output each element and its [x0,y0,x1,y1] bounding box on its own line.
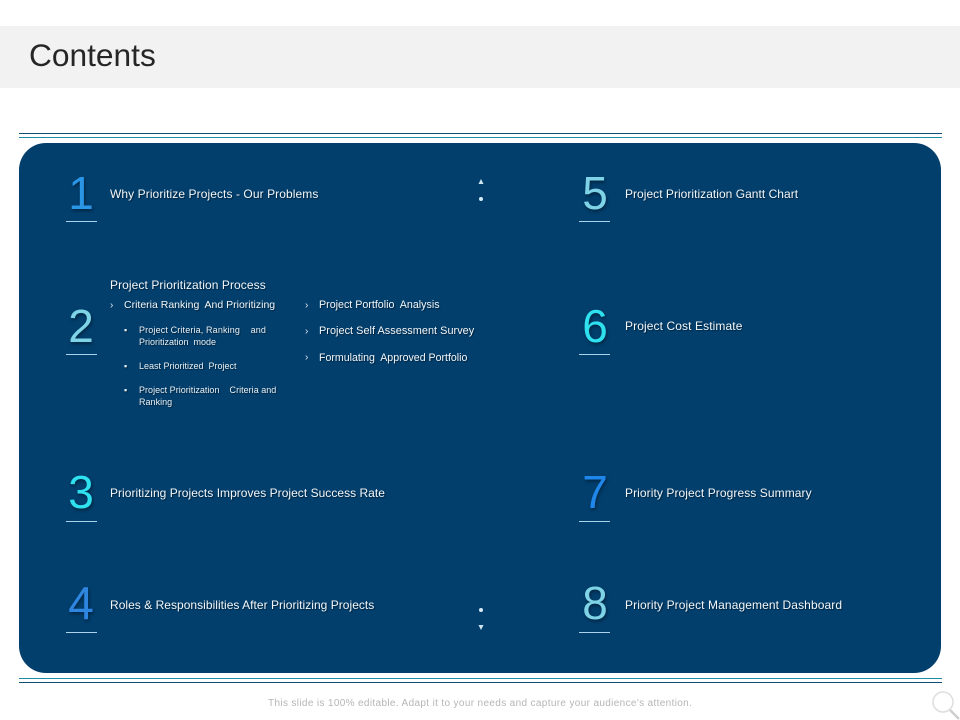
label 8: Priority Project Management Dashboard [625,598,842,612]
item 1 [66,167,320,222]
bottom double rule [19,678,942,683]
item 3 [66,466,386,522]
top double rule [19,133,942,138]
label 7: Priority Project Progress Summary [625,486,812,500]
number 5: 5 [582,167,608,219]
underline 1 [66,221,97,222]
sub list c: Project Self Assessment Survey [319,325,474,337]
bullet a1: ▪ [124,325,127,335]
icon: scroll marker top [478,179,484,201]
icon: scroll marker bottom [478,608,484,630]
icon: magnifier [932,691,960,720]
label 5: Project Prioritization Gantt Chart [625,187,798,201]
item 4 [66,577,375,633]
title: Contents [29,37,156,73]
sub list arrow d: › [305,352,308,363]
number 4: 4 [68,577,94,629]
item 8 [579,577,842,633]
number 8: 8 [582,577,608,629]
underline 5 [579,221,610,222]
sub list arrow b: › [305,300,308,311]
sub list arrow c: › [305,326,308,337]
underline 6 [579,354,610,355]
sub list d: Formulating Approved Portfolio [319,352,467,364]
sub item a3: Ranking [139,397,172,407]
number 1: 1 [68,167,94,219]
sub item a2: Least Prioritized Project [139,361,237,371]
panel: contents list [19,143,941,673]
sub list a: Criteria Ranking And Prioritizing [124,299,275,311]
bullet a3: ▪ [124,385,127,395]
label 1: Why Prioritize Projects - Our Problems [110,187,318,201]
item 7 [579,466,813,522]
heading 2: Project Prioritization Process [110,278,266,292]
underline 4 [66,632,97,633]
sub list arrow a: › [110,300,113,311]
footer note: This slide is 100% editable. Adapt it to your needs and capture your audience's attention. [268,698,692,709]
underline 7 [579,521,610,522]
sub item a3 [139,385,277,408]
underline 2 [66,354,97,355]
number 6: 6 [582,300,608,352]
item 2 [66,278,476,408]
label 3: Prioritizing Projects Improves Project Success Rate [110,486,385,500]
number 3: 3 [68,466,94,518]
underline 3 [66,521,97,522]
number 2: 2 [68,300,94,352]
item 5 [579,167,799,222]
sub item a3: Project Prioritization Criteria and [139,385,276,395]
sub item a1: Project Criteria, Ranking and [139,325,266,335]
bullet a2: ▪ [124,361,127,371]
item 6 [579,300,744,355]
title band [0,26,960,88]
number 7: 7 [582,466,608,518]
sub item a1 [139,325,267,347]
label 4: Roles & Responsibilities After Prioritizing Projects [110,598,374,612]
sub list b: Project Portfolio Analysis [319,299,440,311]
label 6: Project Cost Estimate [625,319,742,333]
underline 8 [579,632,610,633]
sub item a1: Prioritization mode [139,337,216,347]
